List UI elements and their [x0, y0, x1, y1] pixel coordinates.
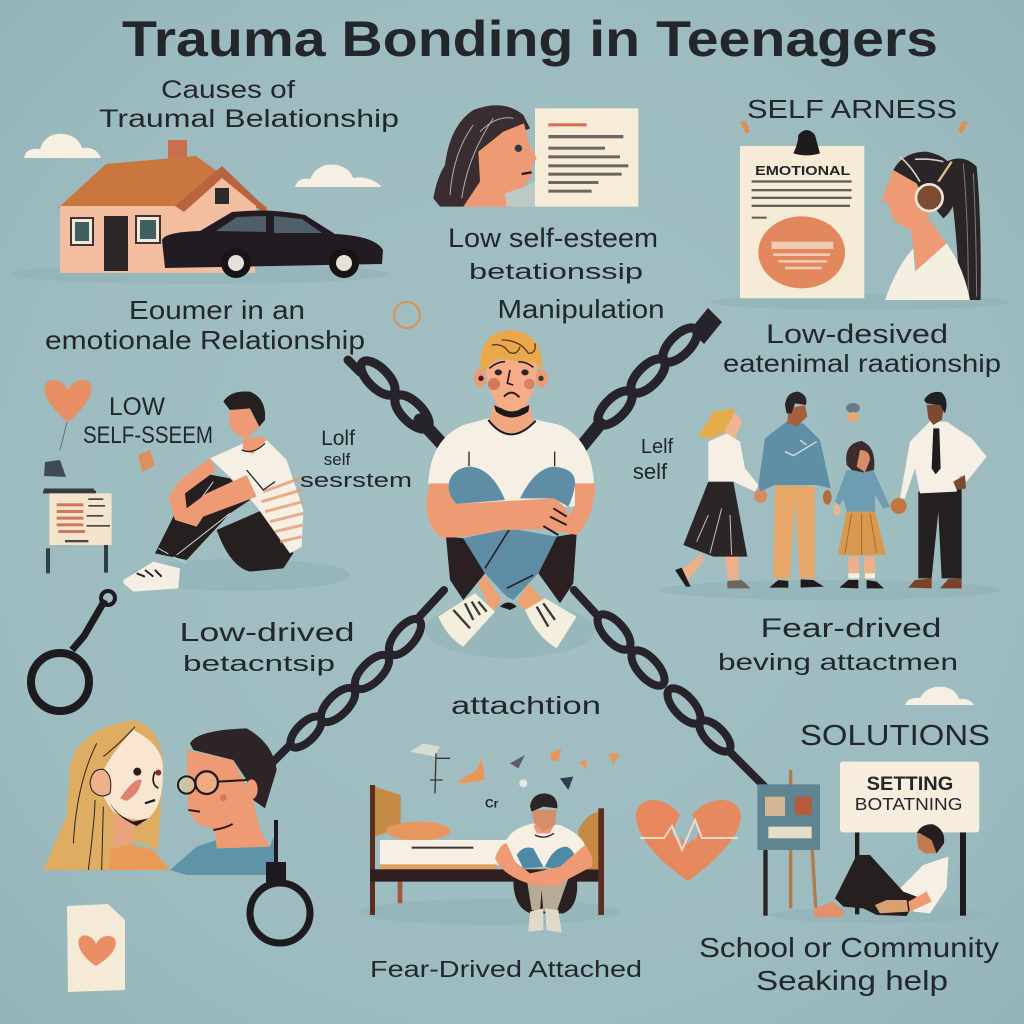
caption: school or community: Seaking help — [756, 965, 948, 996]
heading: causes: Causes of — [161, 76, 295, 104]
caption: low self-esteem left: LOW — [109, 393, 165, 421]
illustration: car — [162, 211, 383, 278]
caption: emotional relationship — [45, 295, 365, 355]
caption: low-drived: Low-drived — [180, 617, 354, 647]
icon: broken heart — [636, 800, 741, 881]
caption: low self-esteem — [448, 223, 658, 284]
caption: lolf self esteem — [300, 427, 412, 492]
flecks near heading — [740, 121, 968, 134]
heading: self awareness: SELF ARNESS — [747, 94, 957, 124]
icon: small ring — [394, 302, 420, 328]
illustration: girl profile with document — [433, 105, 638, 207]
boy — [170, 728, 277, 875]
girl — [43, 720, 170, 870]
chains — [270, 322, 764, 786]
man in blue — [758, 392, 832, 588]
illustration: house — [58, 140, 268, 273]
caption: fear-drived: beving attactmen — [718, 649, 958, 675]
caption: manipulation: Manipulation — [498, 294, 664, 324]
icon: small bird — [846, 403, 860, 422]
caption: low-desived: Low-desived — [766, 319, 948, 349]
man in shirt — [891, 392, 987, 588]
caption: school or community — [699, 932, 999, 996]
illustration: family — [675, 392, 987, 588]
illustration: two faces — [43, 720, 277, 875]
central figure — [427, 330, 595, 648]
caption: low self-esteem: Low self-esteem — [448, 223, 658, 253]
caption: lelf self — [633, 436, 674, 484]
caption: attachtion: attachtion — [451, 692, 601, 720]
caption: lolf self esteem: Lolf — [321, 427, 355, 450]
caption: low-drived: betacntsip — [183, 651, 335, 676]
caption: low self-esteem left — [83, 393, 213, 449]
caption: fear-drived: Fear-drived — [760, 613, 942, 643]
title: Trauma Bonding in Teenagers — [122, 11, 938, 67]
person — [813, 824, 948, 918]
caption: emotional relationship: emotionale Relationship — [45, 325, 365, 355]
illustration: sitting teen — [123, 391, 303, 592]
caption: emotional relationship: Eoumer in an — [129, 295, 305, 325]
easel — [757, 770, 820, 916]
icon: handcuff lower — [250, 820, 310, 943]
floating items — [410, 743, 620, 810]
caption: lelf self: self — [633, 459, 668, 484]
chain end: shackle top right — [690, 308, 722, 344]
icon: handcuff upper left — [31, 591, 115, 711]
icon: heart balloon — [43, 380, 155, 492]
sign: SETTING — [867, 774, 953, 795]
caption: low self-esteem left: SELF-SSEEM — [83, 422, 213, 449]
heading: causes: Traumal Belationship — [99, 105, 399, 133]
caption: lolf self esteem: self — [324, 450, 350, 469]
illustration: poster and ponytail woman — [740, 130, 981, 300]
illustration: easel, sign and resting person — [757, 762, 979, 918]
illustration: bed with teen — [370, 743, 620, 933]
caption: fear-drived attached: Fear-Drived Attached — [370, 956, 642, 982]
caption: lelf self: Lelf — [641, 436, 674, 458]
caption: school or community: School or Community — [699, 932, 999, 963]
illustration: poster and ponytail woman: EMOTIONAL — [755, 163, 850, 178]
caption: low self-esteem: betationssip — [469, 259, 643, 284]
icon: heart note — [67, 904, 125, 992]
girl — [833, 441, 890, 588]
caption: eatening relationship: eatenimal raationship — [723, 350, 1001, 378]
woman — [675, 408, 767, 588]
sign — [840, 762, 979, 916]
icon: cloud right — [905, 687, 974, 705]
heading: causes — [99, 76, 399, 133]
caption: lolf self esteem: sesrstem — [300, 470, 412, 492]
caption: fear-drived — [718, 613, 958, 675]
icon: book on stand — [46, 493, 112, 573]
floating items: Cr — [485, 796, 499, 810]
sign: BOTATNING — [855, 794, 962, 814]
icon: cloud left — [24, 134, 101, 158]
caption: low-drived — [180, 617, 354, 676]
heading: solutions: SOLUTIONS — [800, 720, 990, 752]
icon: cloud middle — [295, 165, 382, 187]
